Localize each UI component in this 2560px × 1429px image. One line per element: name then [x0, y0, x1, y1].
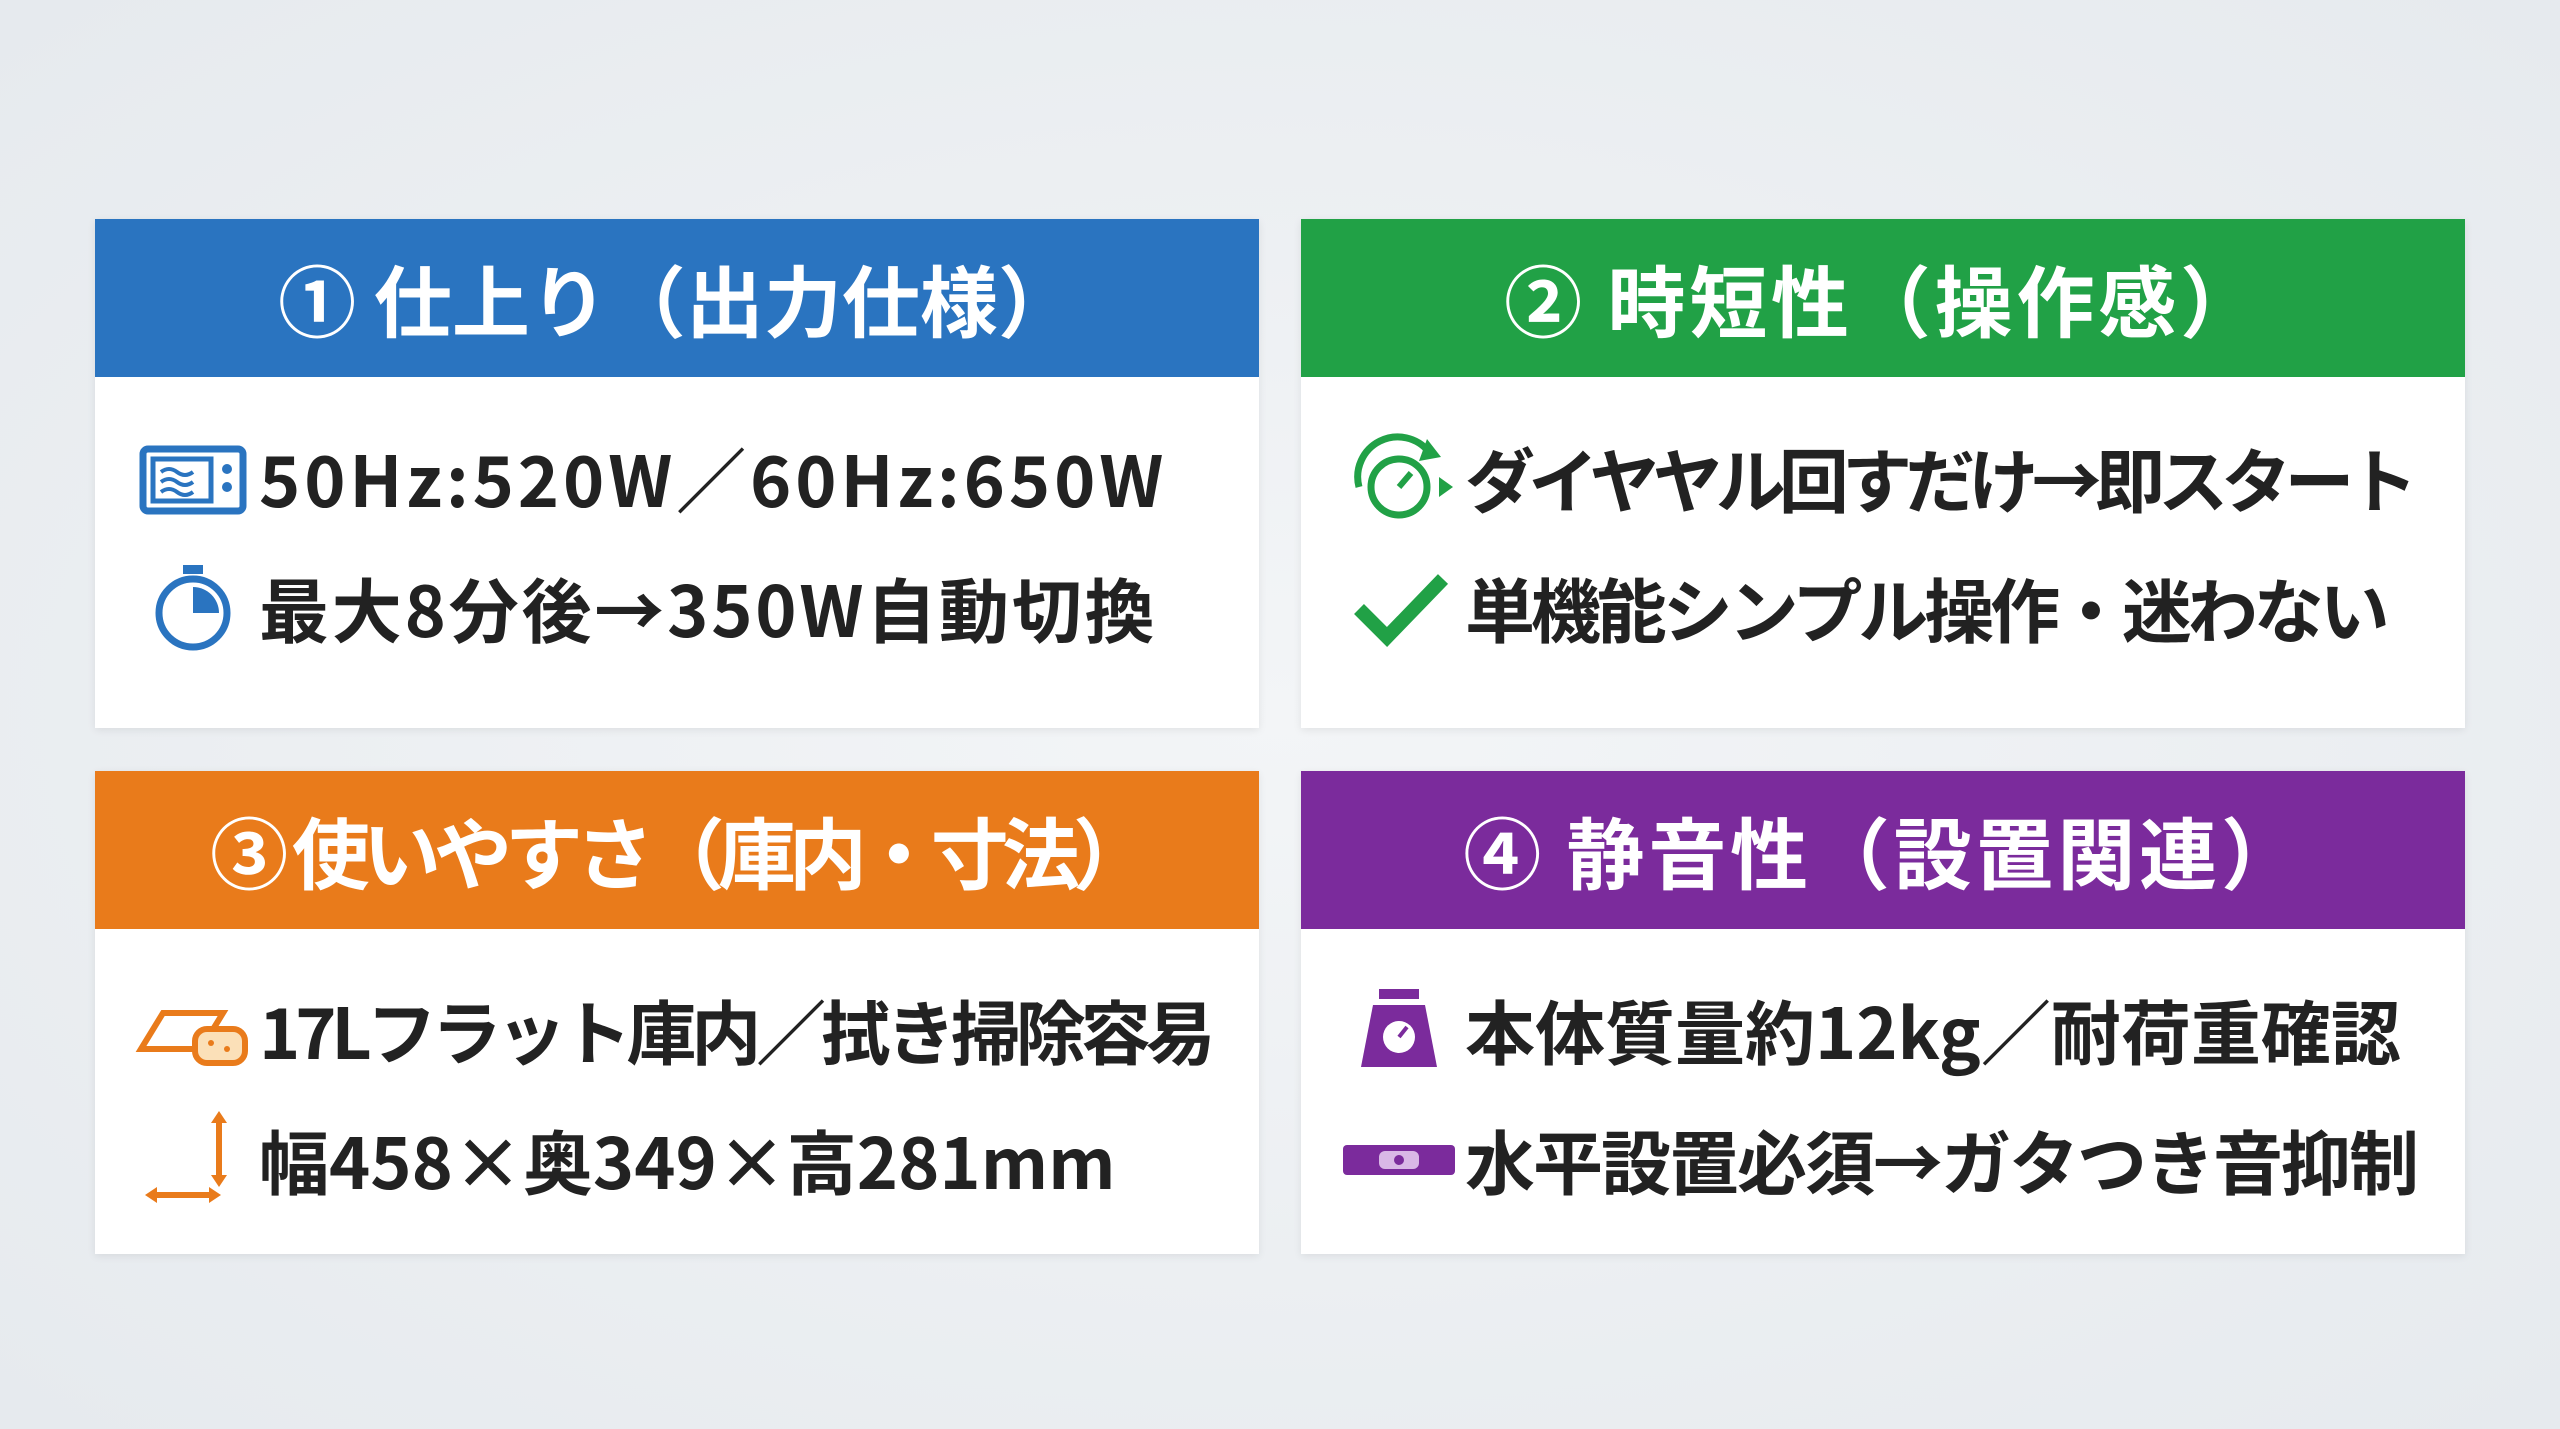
row: dial: ダイヤヤル回すだけ→即スタート [1465, 426, 2411, 528]
heading 4: ④ 静音性（設置関連） [1463, 794, 2303, 906]
panel: 4 quiet [1301, 771, 2465, 1254]
panel: 1 output [95, 219, 1259, 728]
row: level: 水平設置必須→ガタつき音抑制 [1465, 1108, 2417, 1210]
panel: 3 usability [95, 771, 1259, 1254]
heading 2: ② 時短性（操作感） [1504, 242, 2262, 354]
row: dimensions: 幅458×奥349×高281mm [259, 1108, 1116, 1210]
row: timer: 最大8分後→350W自動切換 [259, 556, 1157, 658]
heading 2 [1301, 219, 2465, 377]
heading 4 [1301, 771, 2465, 929]
row: power: 50Hz:520W／60Hz:650W [259, 426, 1167, 528]
heading 3 [95, 771, 1259, 929]
row: flat interior: 17Lフラット庫内／拭き掃除容易 [259, 978, 1210, 1080]
heading 3: ③ 使いやすさ（庫内・寸法） [210, 794, 1144, 906]
heading 1 [95, 219, 1259, 377]
row: check: 単機能シンプル操作・迷わない [1465, 556, 2386, 658]
panel: 2 speed [1301, 219, 2465, 728]
heading 1: ① 仕上り（出力仕様） [278, 242, 1076, 354]
row: scale: 本体質量約12kg／耐荷重確認 [1465, 978, 2401, 1080]
